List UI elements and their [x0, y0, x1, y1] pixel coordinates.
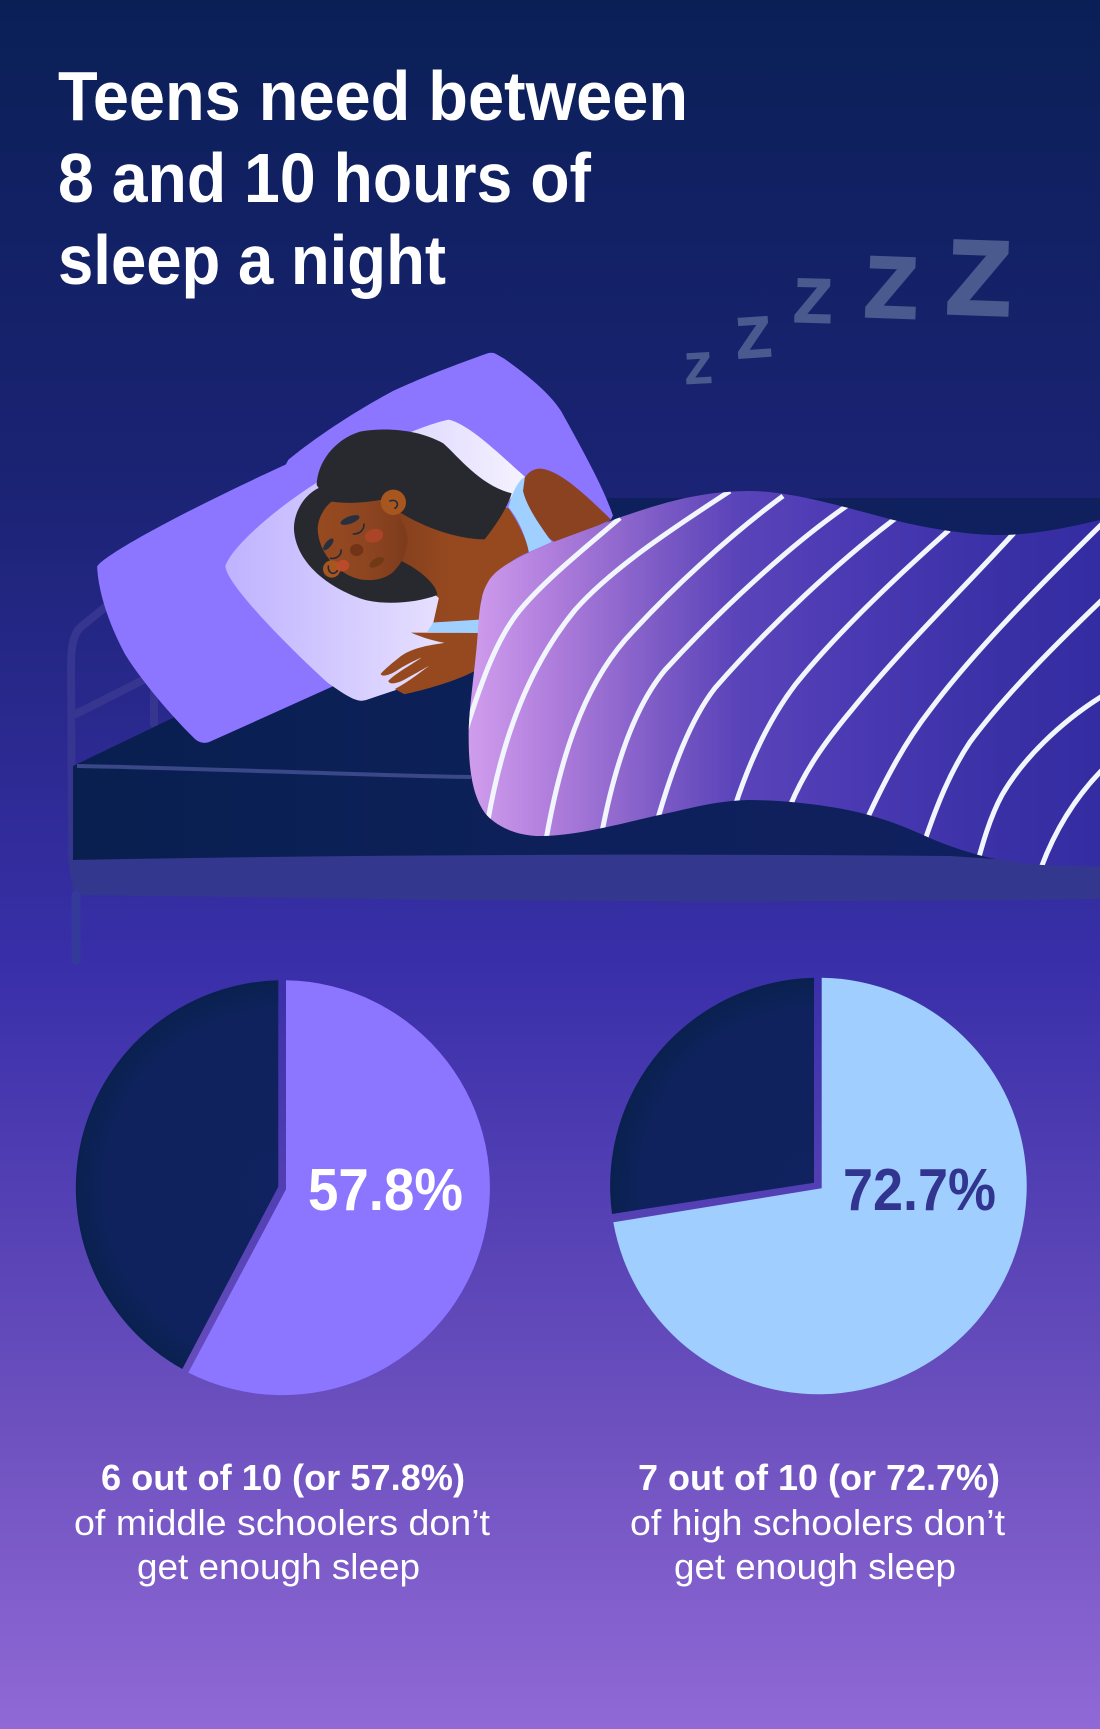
- head: [294, 429, 512, 603]
- title: Teens need between: [58, 57, 688, 135]
- title: sleep a night: [58, 221, 446, 299]
- cheek lower: [334, 558, 351, 573]
- caption: middle schoolers: [74, 1457, 490, 1587]
- bed headboard: [71, 605, 154, 860]
- title: 8 and 10 hours of: [58, 139, 592, 217]
- caption: middle schoolers: of middle schoolers don’t: [74, 1502, 490, 1543]
- caption: high schoolers: 7 out of 10 (or 72.7%): [638, 1457, 1000, 1498]
- top front: [427, 620, 480, 634]
- arm and hand: [381, 633, 480, 694]
- ear lower: [323, 560, 340, 578]
- bed leg: [72, 895, 80, 960]
- inner pillow: [225, 420, 525, 701]
- pie chart: high schoolers 72.7%: [610, 978, 1027, 1394]
- dark slice: [610, 978, 814, 1214]
- icon: sleeping z letters: Z: [793, 267, 833, 337]
- title: [58, 57, 688, 299]
- value: 72.7%: [843, 1157, 996, 1223]
- nose: [350, 544, 363, 556]
- icon: sleeping z letters: Z: [684, 344, 713, 394]
- hair lower: [294, 488, 437, 603]
- caption: middle schoolers: get enough sleep: [137, 1546, 420, 1587]
- hair back: [317, 429, 512, 539]
- mattress: [73, 498, 1100, 880]
- ear upper detail: [390, 500, 397, 508]
- ear upper: [381, 490, 406, 515]
- value: 57.8%: [308, 1157, 463, 1223]
- caption: high schoolers: of high schoolers don’t: [630, 1502, 1005, 1543]
- icon: sleeping z letters: [684, 219, 1013, 394]
- torso: [397, 503, 529, 624]
- eyebrow upper: [339, 513, 361, 527]
- blanket stripes: [466, 491, 1100, 872]
- icon: sleeping z letters: Z: [734, 305, 773, 371]
- bed frame: [68, 855, 1100, 901]
- top strap: [508, 477, 552, 552]
- shoulder: [523, 469, 611, 544]
- icon: sleeping z letters: Z: [863, 239, 919, 337]
- dark slice: [76, 980, 278, 1369]
- illustration: teen sleeping in bed: [68, 353, 1100, 960]
- light slice: [613, 978, 1027, 1394]
- caption: high schoolers: get enough sleep: [674, 1546, 956, 1587]
- icon: sleeping z letters: Z: [945, 219, 1013, 338]
- face: [318, 499, 408, 580]
- eye lower: [331, 550, 341, 558]
- pie chart: middle schoolers 57.8%: [76, 980, 490, 1395]
- pillows and body: [97, 353, 613, 743]
- ear lower detail: [328, 566, 337, 573]
- outer pillow: [97, 353, 613, 743]
- blanket: [466, 491, 1100, 872]
- blanket shape: [469, 491, 1100, 867]
- mattress piping: [77, 766, 471, 777]
- caption: middle schoolers: 6 out of 10 (or 57.8%): [101, 1457, 465, 1498]
- caption: high schoolers: [630, 1457, 1005, 1587]
- light slice: [188, 980, 490, 1395]
- cheek upper: [363, 527, 385, 545]
- eyebrow lower: [321, 537, 335, 552]
- eye upper: [353, 524, 364, 534]
- jaw shadow: [368, 555, 386, 570]
